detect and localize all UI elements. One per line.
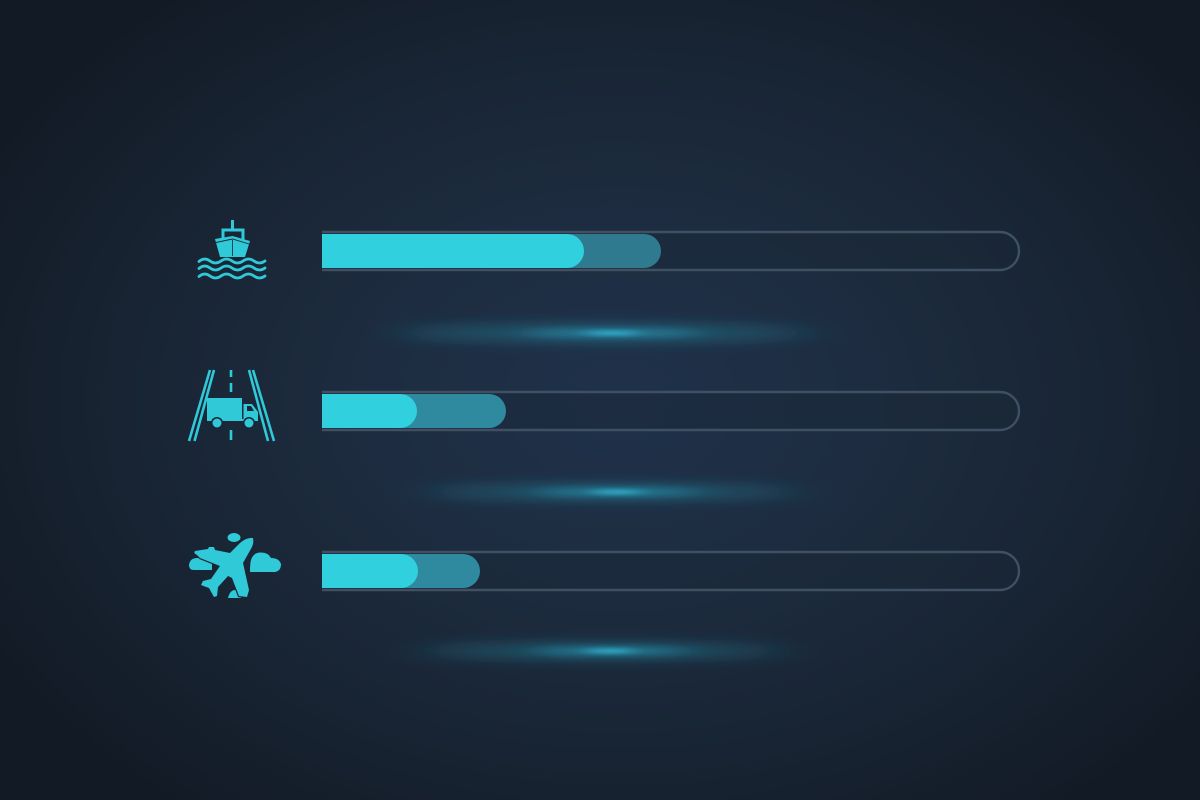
bar secondary segment <box>322 554 480 588</box>
icon: plane with clouds <box>189 533 281 598</box>
glow under bar <box>427 484 797 500</box>
row 3: plane <box>189 533 1019 659</box>
glow under bar <box>400 324 810 342</box>
bar track <box>322 232 1019 270</box>
bar primary segment <box>322 554 418 588</box>
row 2: truck <box>189 370 1019 500</box>
bar track <box>322 552 1019 590</box>
row 1: ship <box>199 220 1019 342</box>
icon: truck on road <box>189 370 274 441</box>
bar primary segment <box>322 394 417 428</box>
bar primary segment <box>322 234 584 268</box>
bar secondary segment <box>322 394 506 428</box>
glow under bar <box>422 643 782 659</box>
icon: ship on waves <box>199 220 265 278</box>
bar track <box>322 392 1019 430</box>
bar secondary segment <box>322 234 661 268</box>
